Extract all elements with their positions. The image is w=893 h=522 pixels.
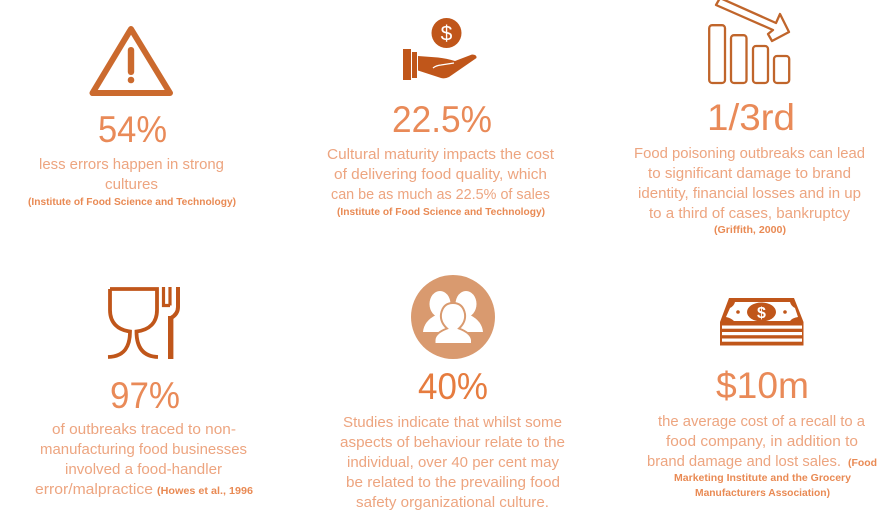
description text [327, 147, 554, 203]
description text [647, 414, 866, 470]
panel: 40% organizational culture [340, 275, 565, 511]
description text: can be as much as 22.5% of sales [331, 187, 550, 203]
description text: aspects of behaviour relate to the [340, 435, 565, 451]
statistic: 54%: 54% [98, 109, 167, 150]
icon: people in circle [411, 275, 495, 359]
description text: of delivering food quality, which [334, 167, 547, 183]
panel: 97% of outbreaks [35, 287, 253, 498]
description text: error/malpractice [35, 482, 153, 498]
citation: (Institute of Food Science and Technology) [28, 196, 236, 208]
statistic: 22.5%: 22.5% [392, 99, 492, 140]
statistic: 97%: 97% [110, 375, 180, 416]
description text [39, 157, 224, 193]
citation [674, 457, 877, 499]
description text: Cultural maturity impacts the cost [327, 147, 554, 163]
statistic: 40%: 40% [418, 366, 488, 407]
panel: 1/3rd bankruptcy [634, 0, 865, 236]
description text: be related to the prevailing food [346, 475, 560, 491]
description text: to significant damage to brand [648, 166, 851, 182]
description text: manufacturing food businesses [40, 442, 247, 458]
description text: to a third of cases, bankruptcy [649, 206, 851, 222]
description text [340, 415, 565, 511]
citation: (Howes et al., 1996 [157, 485, 253, 497]
citation: Marketing Institute and the Grocery [674, 472, 851, 484]
description text: Studies indicate that whilst some [343, 415, 562, 431]
icon: stack of banknotes [720, 298, 804, 346]
description text: individual, over 40 per cent may [347, 455, 560, 471]
description text: Food poisoning outbreaks can lead [634, 146, 865, 162]
description text: cultures [105, 177, 158, 193]
icon: hand holding coin [403, 18, 477, 80]
citation: (Institute of Food Science and Technology) [337, 206, 545, 218]
icon: warning triangle [92, 29, 170, 93]
citation: (Griffith, 2000) [714, 224, 786, 236]
description text: identity, financial losses and in up [638, 186, 861, 202]
description text: of outbreaks traced to non- [52, 422, 236, 438]
icon: glass and fork [108, 287, 178, 359]
citation: Manufacturers Association) [695, 487, 830, 499]
panel: 22.5% of sales [327, 18, 554, 218]
statistic: $10m: $10m [716, 365, 809, 406]
panel: $10m recall cost [647, 298, 877, 499]
panel: 54% less errors [28, 29, 236, 208]
icon: stack of banknotes: $ [757, 305, 766, 322]
description text [35, 422, 247, 498]
statistic: 1/3rd: 1/3rd [707, 97, 795, 138]
description text: safety organizational culture. [356, 495, 549, 511]
description text: less errors happen in strong [39, 157, 224, 173]
description text: brand damage and lost sales. [647, 454, 841, 470]
description text: food company, in addition to [666, 434, 858, 450]
description text: the average cost of a recall to a [658, 414, 866, 430]
icon: hand holding coin: $ [441, 22, 453, 46]
citation: (Food [848, 457, 877, 469]
icon: declining bar chart with arrow [709, 0, 789, 83]
description text [634, 146, 865, 222]
description text: involved a food-handler [65, 462, 222, 478]
